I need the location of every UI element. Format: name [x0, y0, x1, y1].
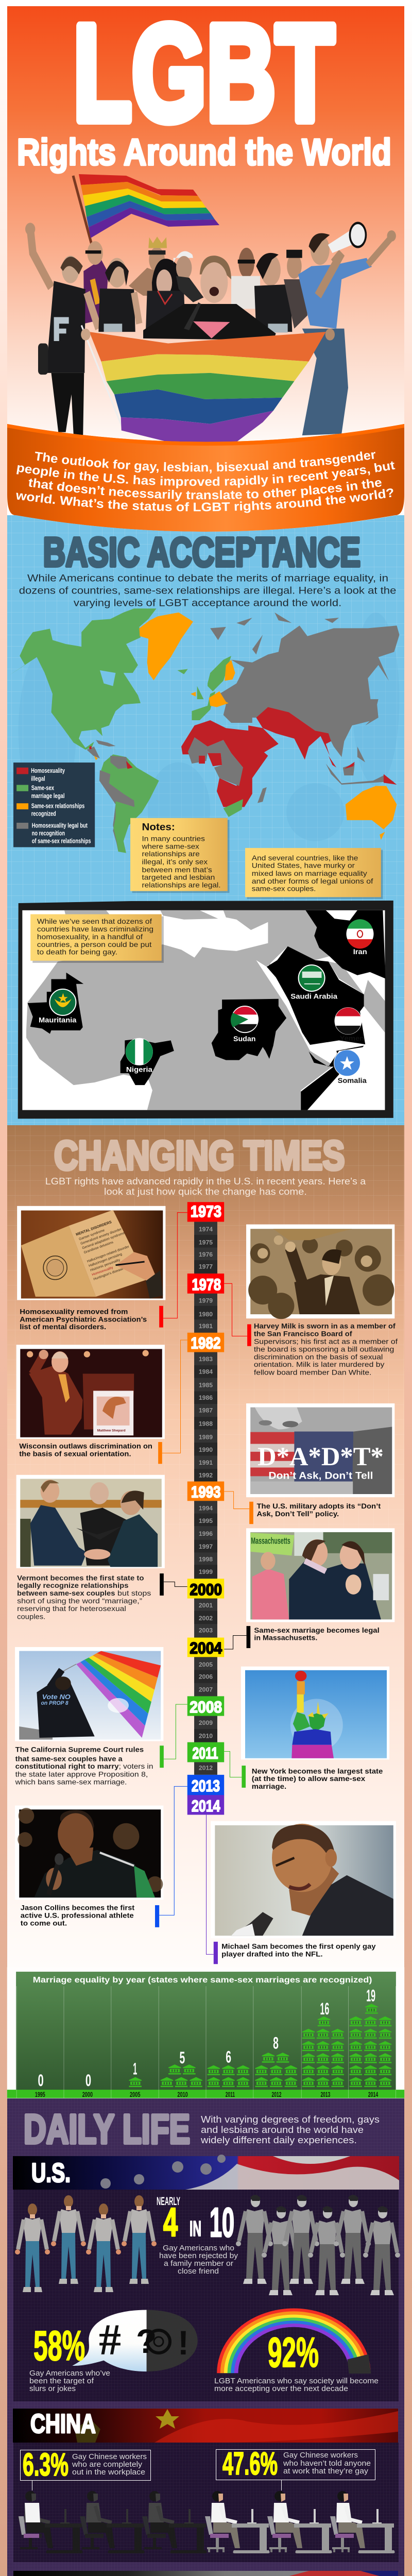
intro text: that doesn’t necessarily translate to other places in the	[29, 478, 382, 502]
note: mixed laws: and other forms of legal unions of	[252, 877, 373, 885]
caption 2000: but stops	[117, 1589, 151, 1597]
stat: 47.6 percent: at work that they’re gay	[283, 2467, 369, 2476]
map legend: Homosexuality	[31, 767, 65, 774]
photo: Prop 8 flag	[15, 1647, 163, 1741]
intro text: look at just how quick the change has come.	[104, 1186, 307, 1197]
center man with pink triangle	[143, 256, 276, 340]
photo: Don't Ask Don't Tell	[246, 1403, 394, 1497]
notes box: relationships are	[142, 850, 200, 858]
year labels	[35, 2091, 378, 2098]
value labels: 0	[85, 2071, 91, 2090]
caption 2014: Michael Sam becomes the first openly gay	[221, 1943, 376, 1951]
daily life intro: With varying degrees of freedom, gays	[201, 2114, 380, 2125]
figures: rejected	[15, 2195, 157, 2292]
map legend: Same-sex	[31, 784, 55, 792]
year block 1982: 1982	[191, 1333, 221, 1352]
photo: psychiatric manual: Histrionic personality	[90, 1258, 121, 1273]
daily life intro	[200, 2114, 380, 2145]
value labels: 8	[273, 2033, 279, 2053]
caption 1978: fellow board member Dan White.	[254, 1368, 371, 1376]
stat: 58 percent with speech bubble: been the target of	[29, 2377, 94, 2385]
caption 2000: Vermont becomes the first state to	[17, 1574, 144, 1582]
caption 1982	[19, 1443, 152, 1458]
year block 2011: 2011	[192, 1743, 218, 1762]
timeline bar: 2009	[199, 1719, 213, 1726]
stat: 47.6 percent: who haven’t told anyone	[283, 2460, 371, 2468]
woman second	[98, 258, 139, 332]
stat: 92 percent rainbow	[214, 2310, 379, 2393]
daily life intro: and lesbians around the world have	[201, 2124, 364, 2135]
intro text: world. What’s the status of LGBT rights around the world?	[16, 488, 393, 513]
stat: 58 percent with speech bubble: Gay Americans who’ve	[29, 2369, 110, 2378]
stat: nearly 4 in 10	[157, 2195, 238, 2276]
photo: psychiatric manual: Ganser syndrome	[78, 1229, 106, 1241]
caption 1973: Homosexuality removed from	[20, 1308, 128, 1316]
intro text: varying levels of LGBT acceptance around the world.	[74, 598, 341, 609]
caption 1978	[254, 1323, 398, 1376]
caption 2000	[17, 1574, 151, 1620]
timeline bar: 1983	[199, 1355, 213, 1363]
photo: psychiatric manual	[17, 1206, 165, 1300]
timeline bar: 1991	[199, 1459, 213, 1466]
photo: psychiatric manual: Huntington's disease	[93, 1267, 124, 1281]
stat: 6.3 percent: out in the workplace	[72, 2468, 145, 2477]
caption 1978: Supervisors; his first act as a member of	[254, 1338, 398, 1346]
timeline bar: 2005	[199, 1661, 213, 1668]
Saudi Arabia	[267, 946, 365, 1045]
caption 1973: American Psychiatric Association’s	[20, 1315, 147, 1323]
timeline bar: 2002	[199, 1615, 213, 1622]
US flag banner	[13, 2155, 399, 2190]
year block 1973: 1973	[191, 1202, 221, 1221]
year block 2013: 2013	[192, 1776, 220, 1795]
photo: Wisconsin	[16, 1345, 165, 1439]
caption 2008: which bans same-sex marriage.	[14, 1778, 127, 1786]
panel: death penalty map	[18, 901, 393, 1118]
timeline bar: 2001	[199, 1602, 213, 1609]
hero panel	[7, 0, 404, 532]
photo: Vermont ceremony	[16, 1475, 165, 1568]
map legend: Homosexuality legal but	[32, 822, 88, 829]
intro text: people in the U.S. has improved rapidly in recent years, but	[16, 462, 396, 488]
year labels: 2000	[82, 2091, 93, 2098]
caption 2004: in Massachusetts.	[254, 1634, 317, 1642]
timeline bar: 1990	[199, 1446, 213, 1453]
marchers photo	[25, 222, 396, 442]
note: death penalty: countries, a person could be put	[37, 941, 152, 948]
US flag banner: U.S.	[31, 2158, 71, 2188]
photo: Michael Sam	[211, 1821, 396, 1938]
notes box: In many countries	[142, 835, 205, 843]
photo: Statue of Liberty	[241, 1667, 389, 1759]
panel: changing times	[7, 1125, 404, 1970]
woman right	[254, 253, 292, 332]
timeline bar: 1985	[199, 1381, 213, 1388]
year block 2004: 2004	[190, 1639, 222, 1657]
timeline bar: 1984	[199, 1368, 213, 1375]
caption 1982: the basis of sexual orientation.	[19, 1450, 131, 1458]
caption 2011: (at the time) to allow same-sex	[252, 1775, 366, 1783]
man with sunglasses white shirt	[231, 248, 260, 309]
stat: 6.3 percent: who are completely	[72, 2461, 143, 2469]
year block 1978: 1978	[192, 1275, 221, 1294]
map legend: recognized	[31, 810, 56, 818]
stat: 92 percent rainbow: more accepting over the next decade	[214, 2385, 348, 2393]
heading: daily life: DAILY LIFE	[24, 2106, 190, 2152]
stat: 92 percent rainbow: LGBT Americans who say society will become	[214, 2377, 379, 2385]
timeline bar: 1997	[199, 1543, 213, 1550]
timeline bar: 1980	[199, 1311, 213, 1318]
caption 1993	[256, 1502, 381, 1518]
photo: psychiatric manual: MENTAL DISORDERS	[75, 1220, 112, 1237]
note: mixed laws: same-sex couples.	[252, 885, 316, 893]
Sudan: Sudan	[233, 1035, 255, 1043]
caption 2011	[252, 1767, 383, 1790]
notes box: Notes:	[142, 822, 175, 833]
timeline bar: 1981	[199, 1323, 213, 1330]
photo: psychiatric manual: Generalized anxiety disorder	[80, 1227, 123, 1246]
year block 1993: 1993	[191, 1483, 221, 1501]
caption 2013: active U.S. professional athlete	[21, 1911, 134, 1919]
panel: basic acceptance	[7, 515, 404, 1125]
caption 2008	[14, 1745, 153, 1786]
UK flag banner	[13, 2571, 398, 2576]
crowned man	[129, 236, 167, 296]
marriage equality chart: 19	[366, 1986, 375, 2005]
stat: nearly 4 in 10: IN	[190, 2216, 201, 2241]
value labels: 16	[320, 1999, 329, 2018]
photo: Massachusetts	[246, 1528, 394, 1622]
Nigeria	[121, 1039, 174, 1085]
timeline bar: 1998	[199, 1556, 213, 1563]
map legend	[13, 762, 95, 847]
woman left with raised arm	[25, 223, 98, 435]
photo: Don't Ask Don't Tell: D*A*D*T*	[258, 1443, 384, 1471]
timeline bar: 2012	[199, 1765, 213, 1772]
photo: Wisconsin: Matthew Shepard	[97, 1429, 126, 1433]
year block 2008: 2008	[190, 1698, 222, 1716]
Nigeria: Nigeria	[126, 1066, 152, 1074]
Saudi Arabia: Saudi Arabia	[290, 992, 337, 1000]
timeline bar: 1987	[199, 1406, 213, 1414]
connector lines	[159, 1213, 249, 1954]
stat: 47.6 percent: 47.6%	[222, 2446, 278, 2482]
panel: China	[13, 2409, 399, 2562]
note: mixed laws: United States, have murky or	[252, 862, 355, 870]
rainbow flag on pole	[73, 174, 219, 256]
man behind right	[284, 250, 307, 329]
panel: U.S.	[13, 2155, 400, 2401]
caption 1982: Wisconsin outlaws discrimination on	[19, 1443, 152, 1450]
note: mixed laws	[245, 848, 383, 899]
caption 2011: marriage.	[252, 1783, 286, 1790]
stat: nearly 4 in 10: 10	[210, 2199, 234, 2245]
daily life intro: widely different daily experiences.	[200, 2134, 357, 2145]
intro text	[19, 573, 396, 609]
intro text	[16, 451, 396, 513]
caption 1973	[20, 1308, 147, 1331]
intro text: The outlook for gay, lesbian, bisexual and transgender	[35, 451, 375, 473]
marriage equality chart	[7, 1967, 404, 2098]
year labels: 2013	[320, 2091, 331, 2098]
stat: 92 percent rainbow: 92%	[268, 2329, 319, 2376]
caption 2014	[221, 1943, 376, 1958]
woman in black with bangs	[146, 259, 185, 329]
value labels: 1	[133, 2059, 137, 2078]
year block 2000: 2000	[190, 1580, 222, 1599]
notes box: between men that’s	[142, 866, 212, 874]
photo: Jason Collins	[15, 1806, 163, 1900]
stat: nearly 4 in 10: NEARLY	[157, 2195, 180, 2208]
timeline bar: 1979	[199, 1297, 213, 1304]
China flag banner: CHINA	[30, 2409, 96, 2439]
timeline bar: 1989	[199, 1433, 213, 1440]
map legend: Same-sex relationships	[31, 802, 84, 809]
intro text: While Americans continue to debate the merits of marriage equality, in	[27, 573, 388, 584]
Mauritania: Mauritania	[39, 1016, 77, 1024]
year labels: 2012	[272, 2091, 282, 2098]
timeline bar: 1976	[199, 1251, 213, 1258]
timeline bar: 2010	[199, 1732, 213, 1739]
intro text: dozens of countries, same-sex relationships are illegal. Here’s a look at the	[19, 585, 396, 597]
caption 1993: Ask, Don’t Tell” policy.	[256, 1510, 339, 1518]
year block 2014: 2014	[192, 1797, 220, 1815]
map legend: marriage legal	[31, 792, 65, 800]
panel: daily life	[7, 2098, 404, 2576]
stat: nearly 4 in 10: 4	[163, 2199, 178, 2245]
Iran	[305, 910, 385, 978]
stat: nearly 4 in 10: have been rejected by	[159, 2252, 238, 2260]
intro banner	[7, 424, 404, 532]
figures: not rejected	[236, 2195, 400, 2295]
world map	[8, 608, 400, 857]
photo: Don't Ask Don't Tell: Don’t Ask, Don’t Tell	[268, 1470, 373, 1481]
man with megaphone	[298, 222, 396, 435]
caption 2008: ; voters in	[119, 1762, 153, 1770]
photo: psychiatric manual: Hallucinogen-related disorder	[87, 1245, 130, 1263]
timeline bar: 1986	[199, 1394, 213, 1401]
caption 2000: couples.	[17, 1613, 45, 1620]
value labels	[38, 1986, 375, 2090]
stat: nearly 4 in 10: Gay Americans who	[163, 2244, 234, 2252]
caption 2011: New York becomes the largest state	[252, 1767, 383, 1775]
caption 2000: between same-sex couples	[17, 1589, 115, 1597]
timeline bar: 1975	[199, 1239, 213, 1246]
caption 2014: player drafted into the NFL.	[221, 1950, 323, 1958]
stat: 6.3 percent: 6.3%	[23, 2447, 68, 2483]
caption 1993: The U.S. military adopts its “Don’t	[256, 1502, 381, 1510]
stat: 6.3 percent	[21, 2447, 150, 2490]
photo: psychiatric manual: Homosexuality	[92, 1266, 114, 1277]
stat: 47.6 percent	[216, 2446, 375, 2490]
caption 2000: legally recognize relationships	[17, 1582, 129, 1589]
photo: Prop 8 flag: on PROP 8	[41, 1700, 68, 1706]
timeline bar: 2003	[199, 1626, 213, 1634]
caption 1978: the San Francisco Board of	[254, 1330, 352, 1337]
photo: Prop 8 flag: Vote NO	[42, 1693, 71, 1701]
timeline bar: 1994	[199, 1505, 213, 1512]
stat: nearly 4 in 10: close friend	[178, 2267, 219, 2276]
timeline bar: 1995	[199, 1517, 213, 1524]
timeline bar: 2006	[199, 1673, 213, 1681]
worker figures	[18, 2491, 395, 2553]
heading: changing times: CHANGING TIMES	[54, 1132, 345, 1178]
caption 1978: discrimination on the basis of sexual	[254, 1353, 383, 1361]
stat: 47.6 percent: Gay Chinese workers	[283, 2451, 358, 2460]
year labels: 2014	[368, 2091, 378, 2098]
stat: 58 percent with speech bubble: 58%	[33, 2323, 85, 2369]
notes box	[130, 818, 229, 893]
timeline bar: 1992	[199, 1471, 213, 1479]
intro text: LGBT rights have advanced rapidly in the U.S. in recent years. Here’s a	[45, 1176, 366, 1187]
caption 1978: orientation. Milk is later murdered by	[254, 1361, 385, 1368]
notes box: targeted and lesbian	[142, 874, 215, 882]
timeline bar: 1974	[199, 1226, 213, 1233]
note: death penalty: homosexuality, in a handful of	[37, 933, 143, 941]
year labels: 1995	[35, 2091, 45, 2098]
stat: 58 percent with speech bubble	[29, 2310, 198, 2393]
year labels: 2010	[177, 2091, 188, 2098]
Yemen: Yemen	[340, 1035, 364, 1042]
grey land	[26, 910, 385, 1110]
caption 2008: that same-sex couples have a	[15, 1755, 123, 1762]
photo: psychiatric manual: Grandiose delusions	[83, 1241, 114, 1255]
man in white cap	[174, 251, 203, 302]
timeline bar	[194, 1222, 217, 1775]
photo: Harvey Milk	[246, 1225, 394, 1319]
timeline bar: 1996	[199, 1530, 213, 1537]
photo: Massachusetts: Massachusetts	[251, 1535, 290, 1546]
timeline bar: 1988	[199, 1420, 213, 1427]
caption 2004: Same-sex marriage becomes legal	[254, 1626, 380, 1634]
panel: United Kingdom	[13, 2571, 399, 2576]
caption 1973: list of mental disorders.	[20, 1323, 106, 1331]
note: death penalty: to death for being gay.	[37, 948, 117, 956]
caption 2013	[21, 1904, 135, 1927]
back marcher with flag pole	[83, 241, 108, 324]
caption 2008: The California Supreme Court rules	[15, 1745, 144, 1753]
caption 2008: constitutional right to marry	[15, 1762, 119, 1770]
notes box: relationships are legal.	[142, 881, 221, 889]
timeline bar: 1999	[199, 1568, 213, 1575]
stat: 58 percent with speech bubble: ?	[136, 2322, 157, 2360]
photo: psychiatric manual: Hallucinogen persisting	[88, 1252, 123, 1268]
caption 2000: reserving that for heterosexual	[17, 1605, 126, 1613]
value labels: 0	[38, 2071, 44, 2090]
note: mixed laws: mixed laws on marriage equality	[252, 870, 367, 877]
Somalia	[301, 1046, 367, 1110]
note: death penalty: While we’ve seen that dozens of	[37, 918, 152, 925]
big rainbow banner held	[81, 325, 335, 442]
map legend: of same-sex relationships	[32, 837, 91, 845]
note: death penalty: countries have laws criminalizing	[37, 925, 153, 933]
caption 2008: the state later approve Proposition 8,	[15, 1770, 148, 1778]
value labels: 5	[179, 2048, 185, 2067]
chart title: Marriage equality by year (states where same-sex marriages are recognized)	[33, 1976, 372, 1985]
map legend: no recognition	[32, 829, 65, 837]
stat: 58 percent with speech bubble: !	[178, 2324, 189, 2362]
stat: nearly 4 in 10: a family member or	[164, 2260, 233, 2268]
note: death penalty	[30, 914, 164, 963]
caption 2013: to come out.	[21, 1920, 67, 1927]
Mauritania	[28, 973, 83, 1034]
Iran: Iran	[353, 948, 367, 956]
notes box: illegal, it’s only sex	[142, 858, 208, 866]
caption 2000: short of using the word “marriage,”	[17, 1597, 142, 1605]
stat: 58 percent with speech bubble: slurs or jokes	[29, 2385, 76, 2393]
Somalia: Somalia	[338, 1077, 367, 1084]
map legend: illegal	[31, 774, 45, 782]
China flag banner	[13, 2409, 398, 2443]
caption 2004	[254, 1626, 380, 1642]
stat: 58 percent with speech bubble: #	[99, 2315, 121, 2364]
photo: psychiatric manual: General adaptation syndrome	[82, 1231, 125, 1250]
caption bars	[155, 1306, 253, 1964]
caption 1978: the board is sponsoring a bill outlawing	[254, 1345, 394, 1353]
caption 2013: Jason Collins becomes the first	[21, 1904, 135, 1912]
value labels: 6	[226, 2047, 231, 2066]
Sudan	[212, 999, 286, 1060]
state icons	[129, 2004, 391, 2087]
year labels: 2005	[130, 2091, 141, 2098]
timeline bar: 2007	[199, 1686, 213, 1693]
stat: 6.3 percent: Gay Chinese workers	[72, 2453, 147, 2461]
notes box: where same-sex	[141, 842, 199, 850]
timeline bar: 1977	[199, 1263, 213, 1270]
Yemen	[334, 1007, 364, 1042]
year labels: 2011	[226, 2091, 235, 2098]
intro text	[45, 1176, 366, 1197]
caption 1978: Harvey Milk is sworn in as a member of	[254, 1323, 396, 1330]
note: mixed laws: And several countries, like the	[252, 854, 358, 862]
